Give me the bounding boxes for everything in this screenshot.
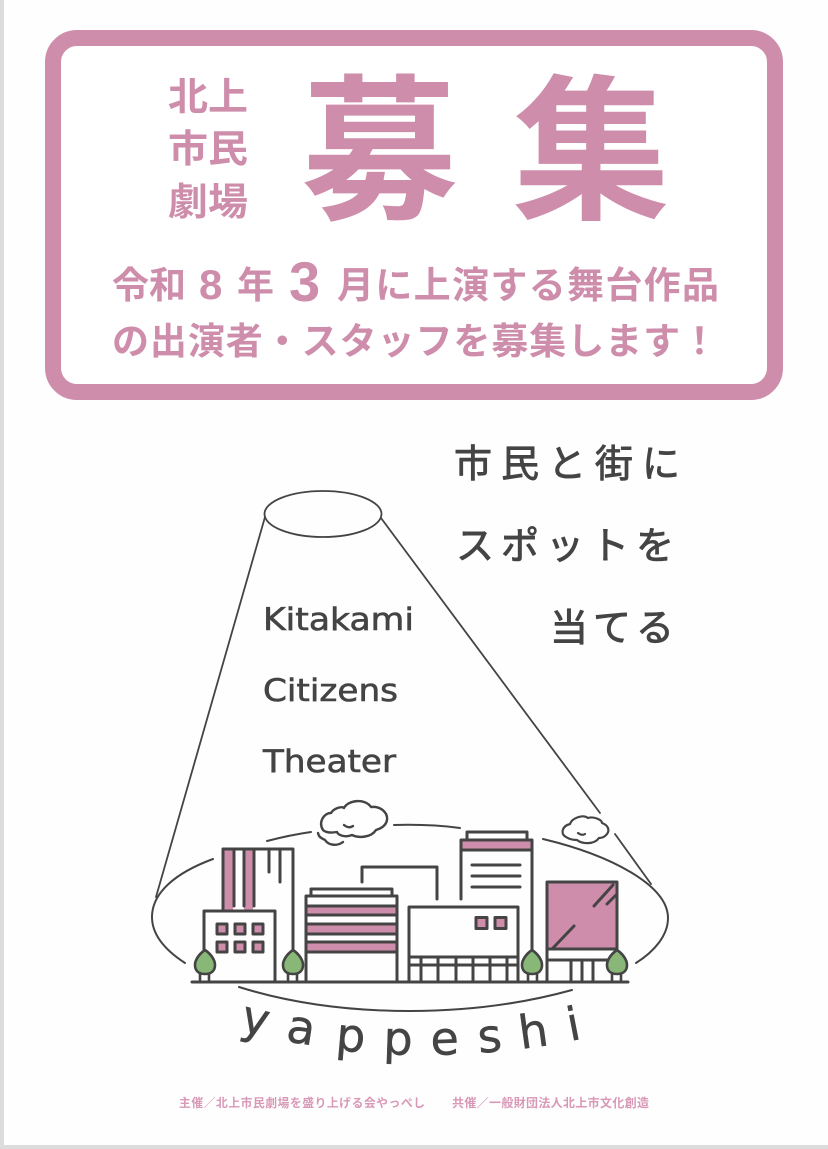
text block: recruitment description	[112, 250, 719, 362]
logo text: yappeshi: y	[237, 989, 275, 1048]
heading: Kitakami Citizens Theater name	[168, 77, 248, 224]
footer: organizers: 主催／北上市民劇場を盛り上げる会やっぺし	[179, 1096, 425, 1110]
heading: Kitakami Citizens Theater name: 北上	[168, 77, 248, 119]
footer: organizers: 共催／一般財団法人北上市文化創造	[452, 1095, 649, 1110]
icon: tree 4	[607, 950, 627, 982]
heading: Kitakami Citizens Theater name: 市民	[168, 129, 248, 171]
logo text: yappeshi: s	[475, 1008, 504, 1064]
building: striped department store	[306, 889, 397, 982]
text block: Kitakami Citizens Theater: Kitakami	[263, 602, 414, 638]
panel: recruitment header frame	[53, 38, 775, 392]
logo text: yappeshi: p	[334, 1007, 368, 1064]
title: recruitment	[301, 66, 670, 241]
title: recruitment: 集	[513, 66, 670, 241]
icon: tree 3	[522, 950, 542, 982]
tagline: spotlight on citizens and the town: スポットを	[456, 515, 674, 570]
logo text: yappeshi: i	[562, 996, 585, 1052]
text block: Kitakami Citizens Theater	[262, 602, 414, 780]
text block: recruitment description: 3	[289, 250, 320, 313]
icon: tree 1	[195, 950, 215, 982]
icon: large cloud	[318, 801, 387, 845]
tagline: spotlight on citizens and the town: 市民と街に	[454, 433, 680, 488]
tagline: spotlight on citizens and the town: 当てる	[550, 597, 674, 652]
icon: tree 2	[283, 950, 303, 982]
text block: recruitment description: の出演者・スタッフを募集します！	[112, 321, 718, 362]
footer: organizers	[179, 1095, 649, 1110]
logo text: yappeshi: h	[515, 1002, 551, 1060]
text block: recruitment description: 8	[199, 261, 222, 308]
spotlight cone	[156, 491, 651, 897]
building: office tower with pink band	[461, 832, 532, 950]
building: glass-front pink building	[547, 882, 617, 982]
town ellipse ring	[152, 825, 668, 1011]
tagline: spotlight on citizens and the town	[454, 433, 680, 652]
logo text: yappeshi: e	[429, 1011, 460, 1066]
building: tall striped tower	[223, 849, 293, 950]
building: front office with windows	[204, 911, 275, 982]
text block: Kitakami Citizens Theater: Citizens	[263, 673, 398, 709]
ground line	[192, 980, 628, 984]
text block: recruitment description: 令和	[112, 265, 186, 306]
title: recruitment: 募	[301, 66, 458, 241]
logo text: yappeshi: a	[283, 999, 320, 1056]
illustration: city buildings	[192, 832, 628, 982]
heading: Kitakami Citizens Theater name: 劇場	[168, 182, 248, 224]
logo text: yappeshi	[237, 989, 585, 1066]
text block: Kitakami Citizens Theater: Theater	[262, 744, 396, 780]
text block: recruitment description: 月に上演する舞台作品	[337, 265, 719, 306]
logo text: yappeshi: p	[383, 1011, 414, 1066]
building: low hall with back bracket	[362, 867, 518, 982]
text block: recruitment description: 年	[237, 265, 274, 306]
icon: small cloud	[563, 816, 608, 843]
